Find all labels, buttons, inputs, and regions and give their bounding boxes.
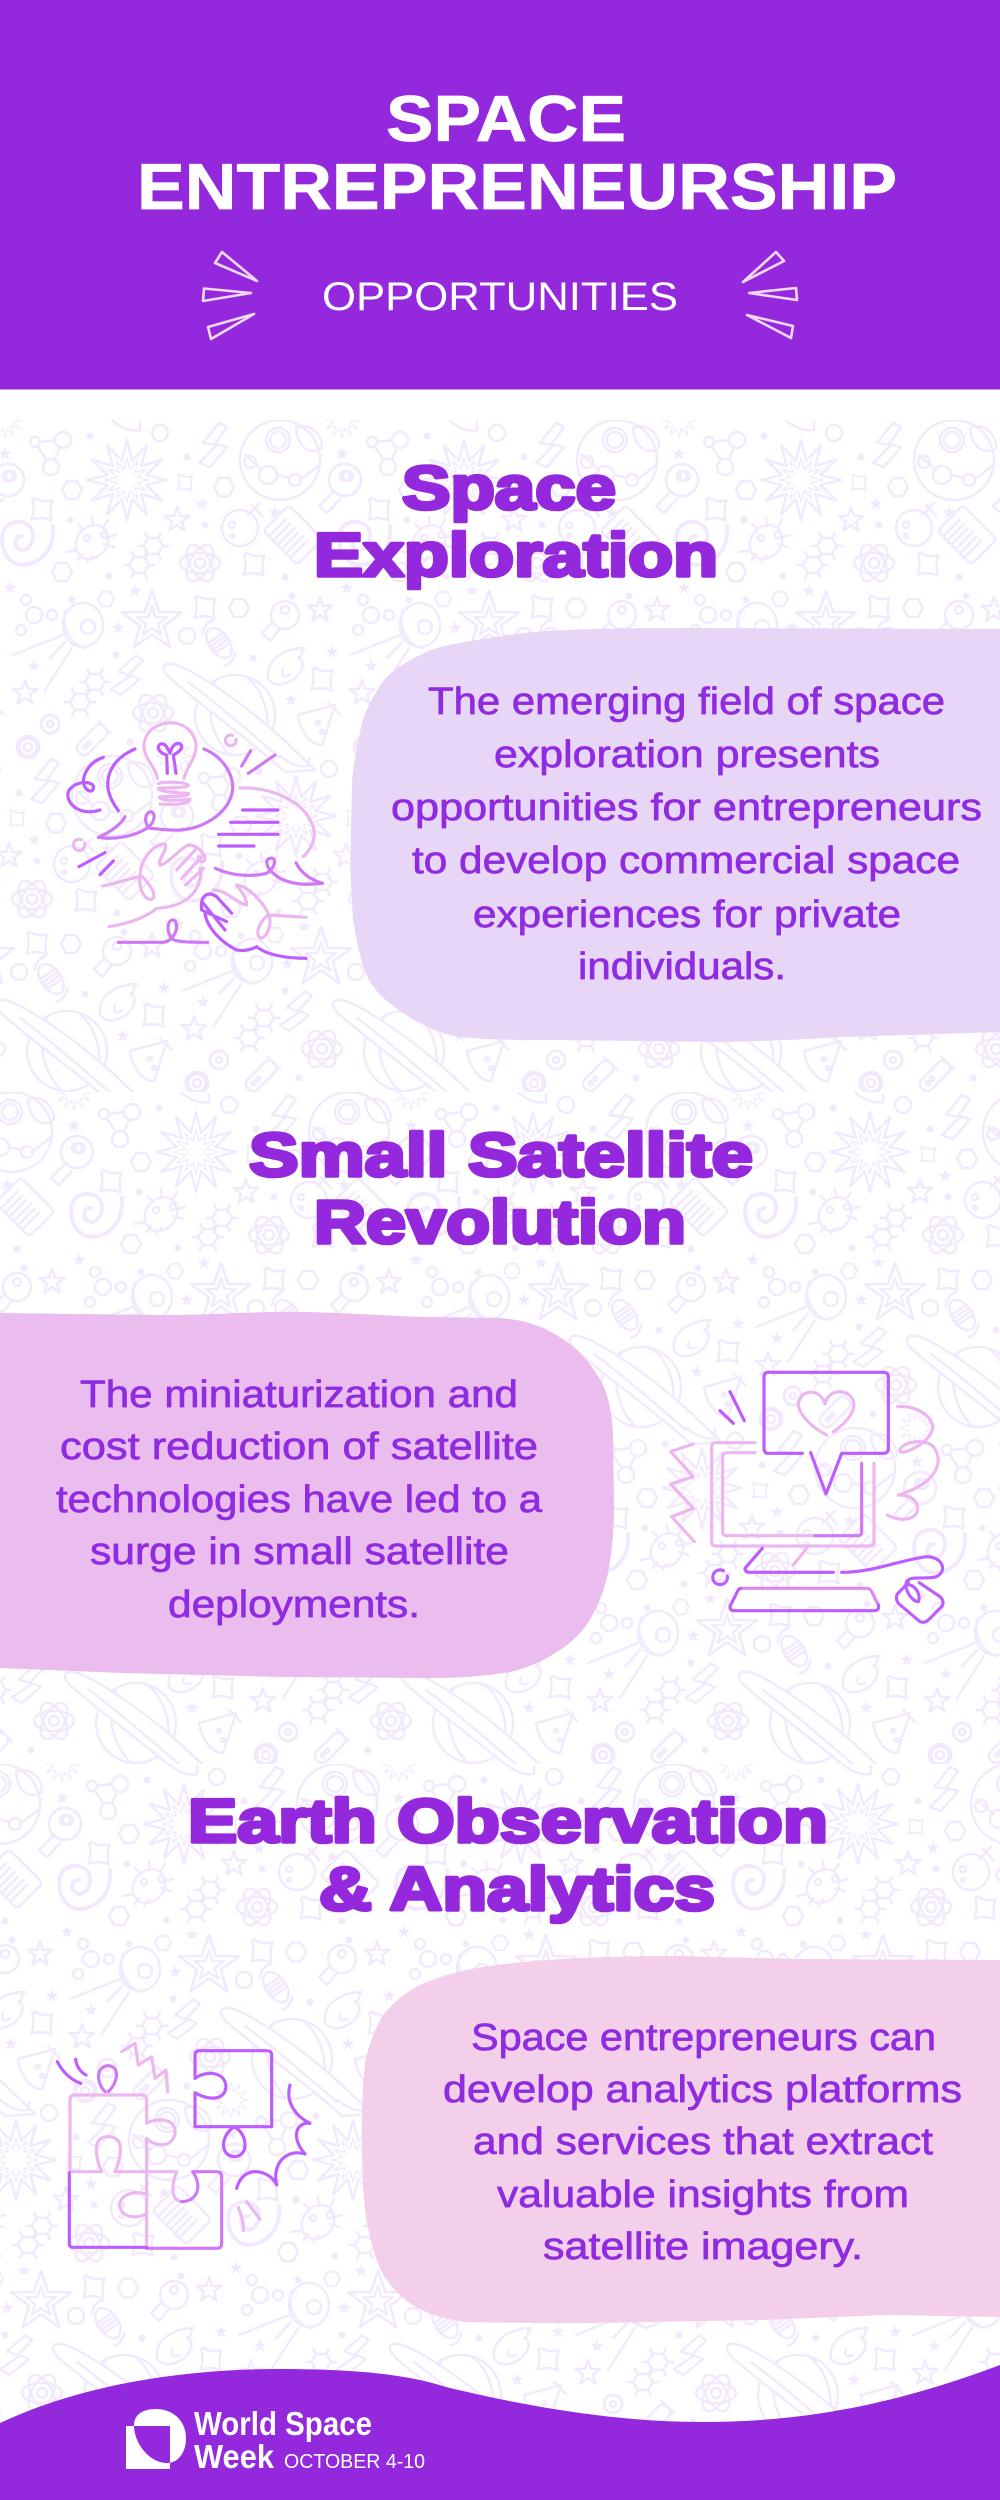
icon: puzzle pieces <box>57 2043 310 2248</box>
heading: Small Satellite Revolution <box>249 1121 753 1256</box>
subtitle: OPPORTUNITIES <box>322 275 678 319</box>
text: earth observation body <box>443 2017 962 2268</box>
icon: lightbulb, speech bubbles and hands <box>68 723 323 958</box>
footer wave <box>0 2365 1000 2500</box>
heading: Space Exploration <box>314 454 718 589</box>
footer text: World Space Week: OCTOBER 4-10 <box>284 2451 425 2473</box>
heading: Space Exploration: Exploration <box>314 521 718 589</box>
icon: computer with heart speech bubble <box>671 1372 943 1622</box>
text: space exploration body: opportunities for entrepreneurs <box>391 787 982 829</box>
text: space exploration body: experiences for private <box>473 894 901 936</box>
footer text: World Space Week: World Space <box>194 2405 372 2442</box>
text: small satellite body: technologies have led to a <box>56 1479 543 1521</box>
text: small satellite body: cost reduction of satellite <box>60 1426 538 1468</box>
text: earth observation body: valuable insights from <box>497 2174 909 2216</box>
heading: Small Satellite Revolution: Revolution <box>314 1188 686 1256</box>
panel: earth observation blob <box>362 1956 1000 2323</box>
text: small satellite body: The miniaturization and <box>80 1374 518 1416</box>
text: earth observation body: develop analytics platforms <box>443 2069 962 2111</box>
heading: Earth Observation & Analytics: Earth Observation <box>188 1787 828 1855</box>
footer text: World Space Week <box>194 2405 425 2475</box>
heading: Earth Observation & Analytics: & Analytics <box>319 1855 715 1923</box>
text: small satellite body: deployments. <box>168 1584 420 1626</box>
icon: left sparks <box>203 252 257 339</box>
icon: World Space Week logo <box>126 2409 186 2469</box>
text: small satellite body <box>56 1374 543 1626</box>
panel: space exploration blob <box>350 628 1000 1042</box>
title: ENTREPRENEURSHIP <box>137 150 897 223</box>
icon: right sparks <box>743 252 797 338</box>
heading: Space Exploration: Space <box>402 454 616 522</box>
title: SPACE <box>386 82 626 155</box>
text: space exploration body: to develop commercial space <box>412 840 960 882</box>
text: space exploration body: exploration presents <box>494 734 880 776</box>
text: earth observation body: Space entrepreneurs can <box>471 2017 936 2059</box>
heading: Earth Observation & Analytics <box>188 1787 828 1923</box>
text: earth observation body: satellite imagery. <box>543 2226 863 2268</box>
text: small satellite body: surge in small satellite <box>90 1531 509 1573</box>
text: space exploration body <box>391 681 982 988</box>
panel: small satellite blob <box>0 1312 614 1678</box>
heading: Small Satellite Revolution: Small Satellite <box>249 1121 753 1189</box>
text: space exploration body: The emerging field of space <box>428 681 945 723</box>
title <box>137 82 897 223</box>
panel: header band <box>0 0 1000 390</box>
text: earth observation body: and services that extract <box>473 2121 933 2163</box>
text: space exploration body: individuals. <box>578 946 786 988</box>
footer text: World Space Week: Week <box>194 2438 275 2475</box>
